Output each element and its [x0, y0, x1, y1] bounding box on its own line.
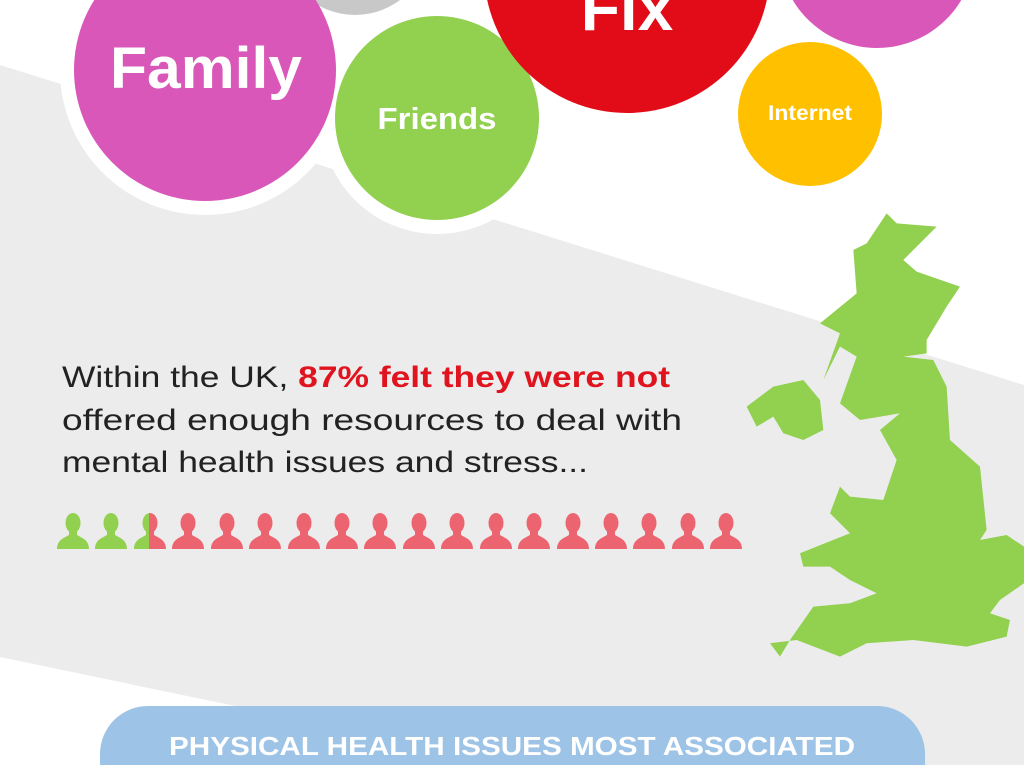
bubble: internet: Internet — [768, 102, 852, 125]
bubble: pink top right — [779, 0, 975, 48]
bubbles cluster — [60, 0, 989, 234]
bubble: fix — [484, 0, 770, 113]
bubble: internet — [738, 42, 882, 186]
text block: UK statistic — [62, 361, 682, 479]
pictogram: 18 people — [57, 513, 742, 549]
bubble: family: Family — [110, 36, 302, 101]
banner: physical health issues — [100, 706, 925, 765]
banner: physical health issues: PHYSICAL HEALTH ISSUES MOST ASSOCIATED — [169, 731, 855, 761]
text block: UK statistic: Within the UK, 87% felt they were not — [62, 361, 670, 394]
bubble: family — [74, 0, 336, 201]
text block: UK statistic: mental health issues and stress... — [62, 446, 588, 479]
map: UK — [747, 213, 1024, 657]
bubble: friends — [335, 16, 539, 220]
bubble: grey — [280, 0, 430, 15]
bubble: friends: Friends — [378, 101, 496, 136]
text block: UK statistic: offered enough resources to deal with — [62, 404, 682, 437]
